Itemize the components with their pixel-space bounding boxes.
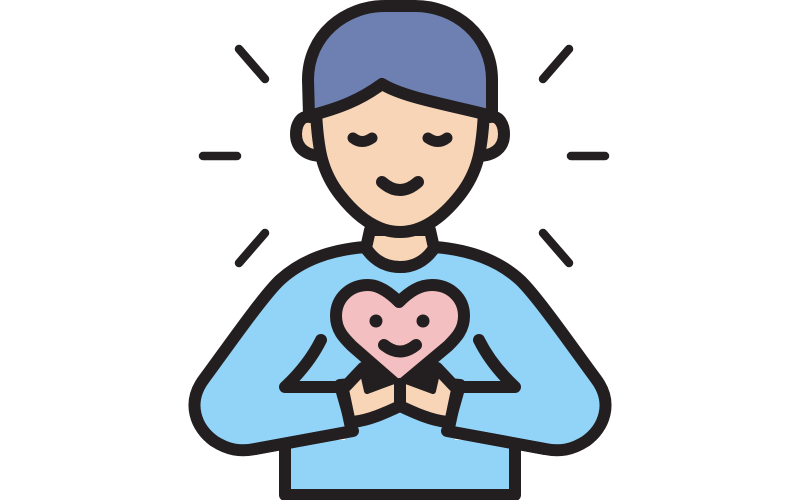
closed eyes xyxy=(353,138,447,142)
heart smile xyxy=(384,345,416,352)
left hand xyxy=(342,368,400,428)
heart xyxy=(336,285,464,387)
right inner arm crease xyxy=(459,340,515,387)
hair xyxy=(308,6,492,116)
torso and shirt xyxy=(195,247,605,495)
smile xyxy=(382,182,418,190)
right sleeve edge xyxy=(447,431,545,449)
heart eyes xyxy=(370,314,382,328)
left sleeve edge xyxy=(255,431,353,449)
right hand xyxy=(400,368,458,428)
right ear xyxy=(477,117,504,156)
left ear xyxy=(296,117,323,156)
face xyxy=(316,84,484,232)
radiating rays xyxy=(203,49,605,263)
left inner arm crease xyxy=(285,340,341,387)
neck xyxy=(366,230,434,267)
